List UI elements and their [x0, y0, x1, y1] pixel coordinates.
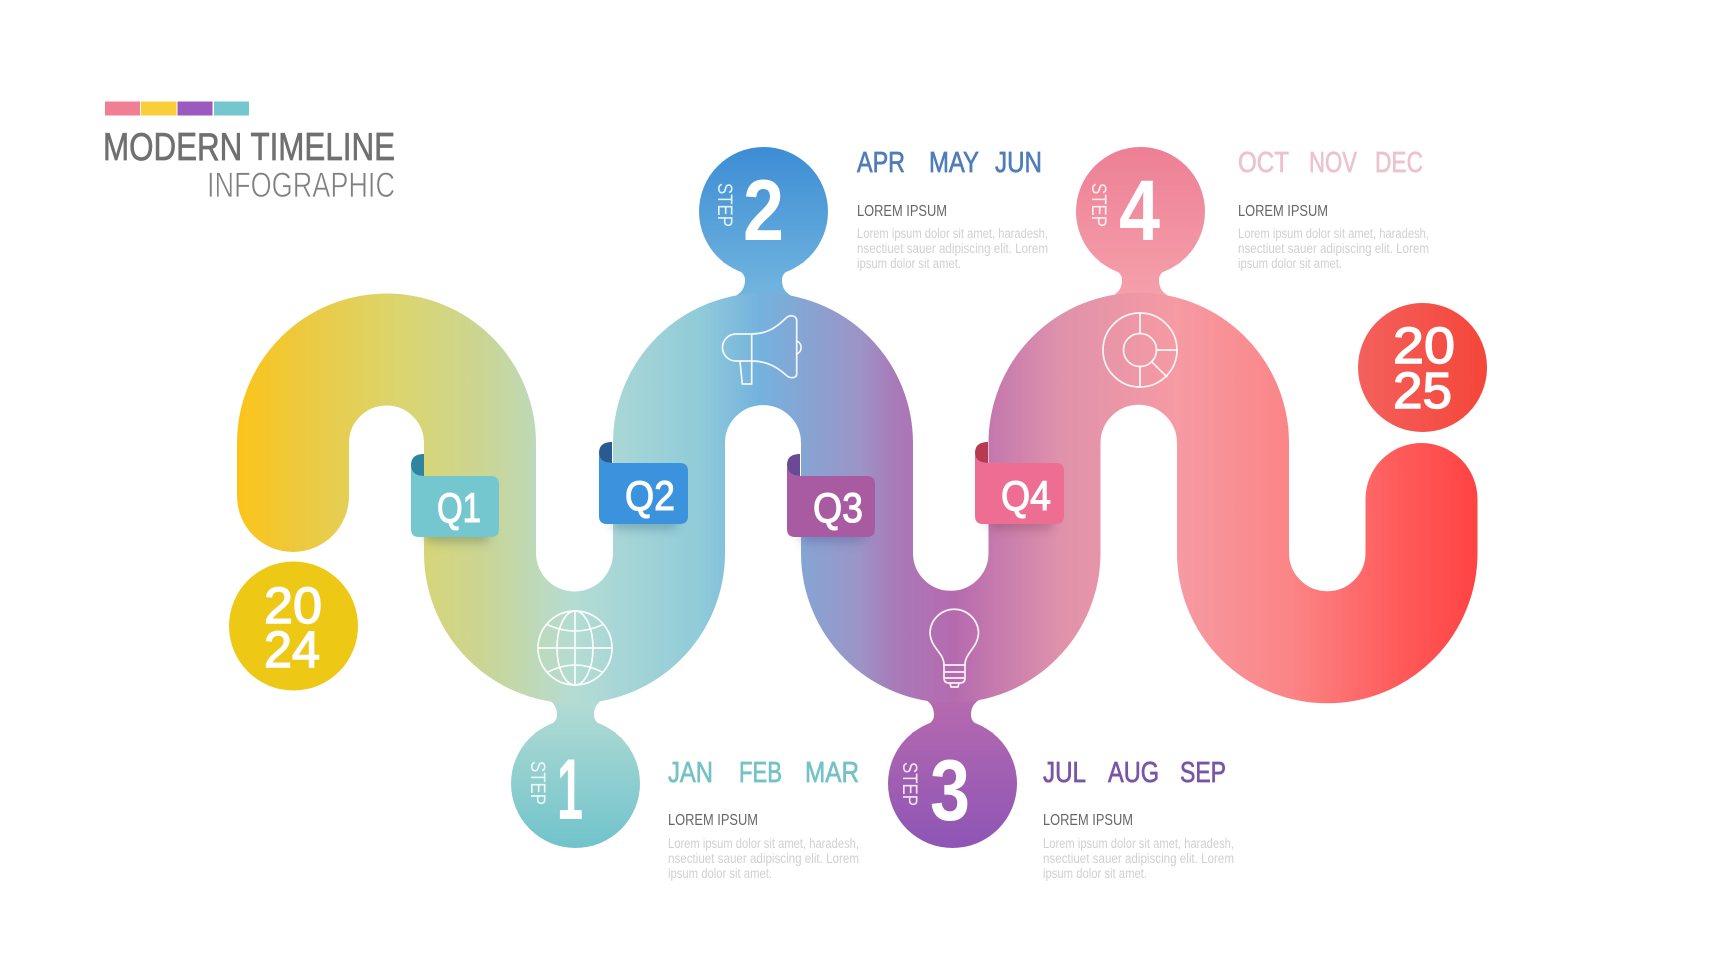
tag: Q2 — [599, 442, 688, 529]
step 2 badge — [699, 147, 828, 297]
text block: step 2: JUN — [995, 147, 1042, 179]
text block: step 4: nsectiuet sauer adipiscing elit. Lorem — [1238, 241, 1429, 256]
year 2024 badge: 24 — [264, 621, 320, 678]
step 1 badge: 1 — [557, 742, 583, 838]
colour bars — [105, 102, 249, 116]
text block: step 3: AUG — [1108, 757, 1159, 789]
year 2024 badge — [229, 562, 358, 690]
text block: step 2: APR — [857, 147, 905, 179]
tag: Q2: Q2 — [625, 472, 675, 519]
step 3 badge: STEP — [898, 762, 921, 806]
year 2024 badge: 20 — [264, 577, 322, 634]
text block: step 3 — [1043, 757, 1234, 881]
title: INFOGRAPHIC — [207, 166, 395, 205]
tag: Q1: Q1 — [437, 484, 481, 531]
title: MODERN TIMELINE — [103, 126, 395, 169]
step 4 badge — [1076, 147, 1205, 297]
text block: step 3: Lorem ipsum dolor sit amet, haradesh, — [1043, 836, 1234, 851]
step 3 badge — [888, 698, 1017, 848]
text block: step 4: Lorem ipsum dolor sit amet, haradesh, — [1238, 226, 1429, 241]
step 3 badge: 3 — [930, 743, 970, 839]
text block: step 1 — [668, 757, 859, 881]
tag: Q1 — [411, 454, 499, 542]
step 1 badge — [511, 698, 640, 848]
text block: step 3: LOREM IPSUM — [1043, 812, 1133, 829]
year 2025 badge: 25 — [1393, 362, 1452, 419]
text block: step 1: FEB — [739, 757, 782, 789]
text block: step 1: Lorem ipsum dolor sit amet, haradesh, — [668, 836, 859, 851]
text block: step 2: Lorem ipsum dolor sit amet, haradesh, — [857, 226, 1048, 241]
step 2 badge: STEP — [713, 183, 736, 227]
text block: step 4: OCT — [1238, 147, 1289, 179]
title — [103, 126, 395, 205]
step 2 badge: 2 — [743, 163, 784, 259]
text block: step 2: ipsum dolor sit amet. — [857, 256, 961, 271]
text block: step 3: SEP — [1180, 757, 1226, 789]
text block: step 2: nsectiuet sauer adipiscing elit. Lorem — [857, 241, 1048, 256]
icon: globe — [538, 611, 612, 685]
serpentine timeline ribbon — [293, 349, 1422, 647]
text block: step 4: LOREM IPSUM — [1238, 203, 1328, 220]
icon: megaphone — [722, 316, 801, 384]
text block: step 4: NOV — [1309, 147, 1358, 179]
tag: Q4: Q4 — [1001, 472, 1051, 519]
step 1 badge: STEP — [526, 761, 549, 805]
text block: step 4: ipsum dolor sit amet. — [1238, 256, 1342, 271]
text block: step 1: LOREM IPSUM — [668, 812, 758, 829]
text block: step 1: nsectiuet sauer adipiscing elit. Lorem — [668, 851, 859, 866]
icon: donut chart — [1103, 313, 1177, 387]
year 2025 badge: 20 — [1393, 317, 1455, 374]
text block: step 1: JAN — [668, 757, 713, 789]
text block: step 2: LOREM IPSUM — [857, 203, 947, 220]
tag: Q4 — [975, 442, 1064, 529]
year 2025 badge — [1358, 303, 1487, 432]
text block: step 1: ipsum dolor sit amet. — [668, 866, 772, 881]
text block: step 3: nsectiuet sauer adipiscing elit. Lorem — [1043, 851, 1234, 866]
text block: step 2: MAY — [929, 147, 979, 179]
text block: step 3: JUL — [1043, 757, 1086, 789]
text block: step 2 — [857, 147, 1048, 271]
step 4 badge: 4 — [1119, 163, 1160, 259]
tag: Q3: Q3 — [813, 484, 863, 531]
text block: step 4: DEC — [1375, 147, 1423, 179]
text block: step 1: MAR — [805, 757, 859, 789]
text block: step 4 — [1238, 147, 1429, 271]
icon: light bulb — [930, 609, 978, 687]
step 4 badge: STEP — [1087, 183, 1110, 227]
text block: step 3: ipsum dolor sit amet. — [1043, 866, 1147, 881]
tag: Q3 — [787, 454, 875, 542]
